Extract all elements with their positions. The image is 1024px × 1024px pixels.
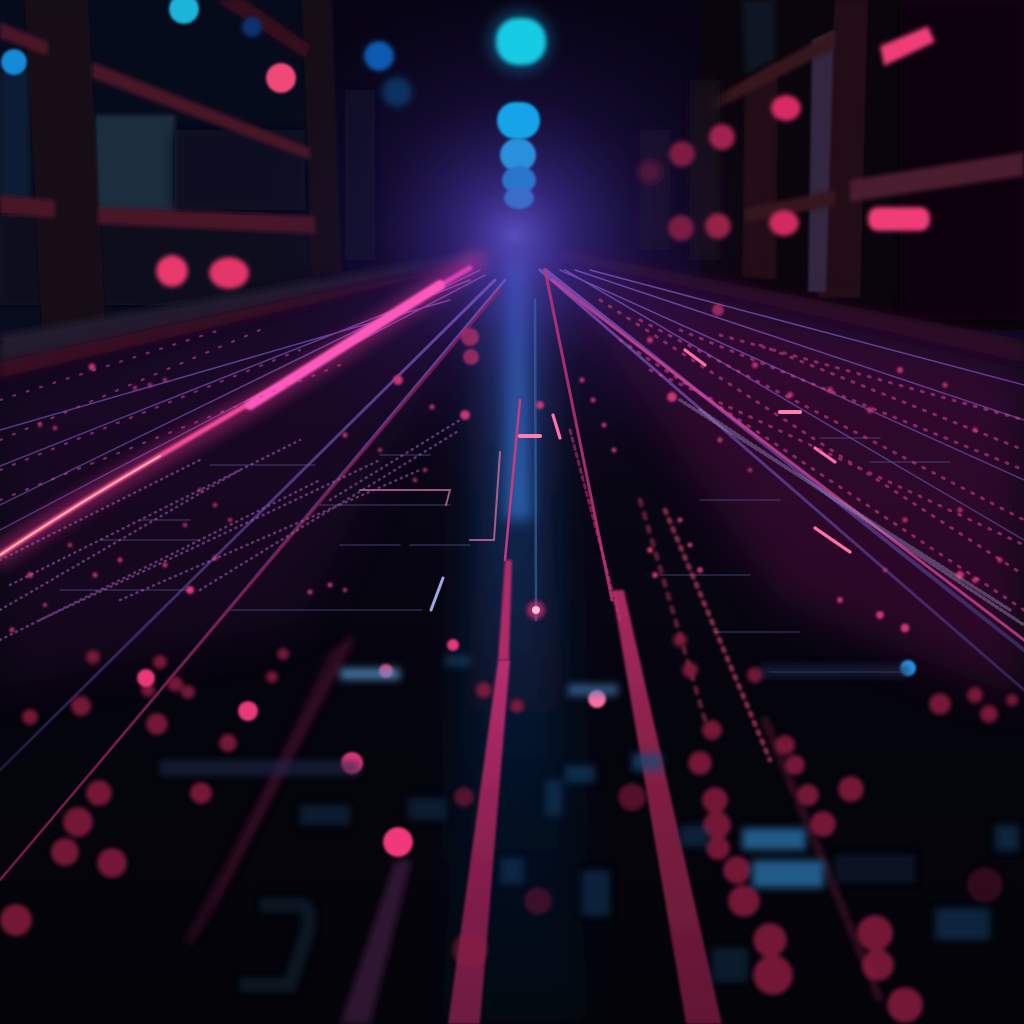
background bbox=[0, 0, 1024, 340]
left bridge structure bbox=[0, 0, 375, 328]
glowing pink streak bbox=[0, 262, 475, 555]
overhead blue lights bbox=[1, 0, 552, 209]
dense speckle bands bbox=[0, 300, 1024, 1000]
scattered pixel lights: mid field bbox=[10, 304, 1002, 632]
circuit traces bbox=[0, 270, 1024, 1024]
thick foreground pink rails bbox=[195, 560, 722, 1024]
right bridge structure bbox=[640, 0, 1024, 320]
floor bbox=[0, 250, 1024, 1024]
overhead pink lights bbox=[156, 26, 935, 289]
blue foreground chips bbox=[160, 655, 1019, 985]
bokeh lights: foreground bbox=[0, 586, 1018, 1023]
central purple haze bbox=[200, 0, 840, 500]
